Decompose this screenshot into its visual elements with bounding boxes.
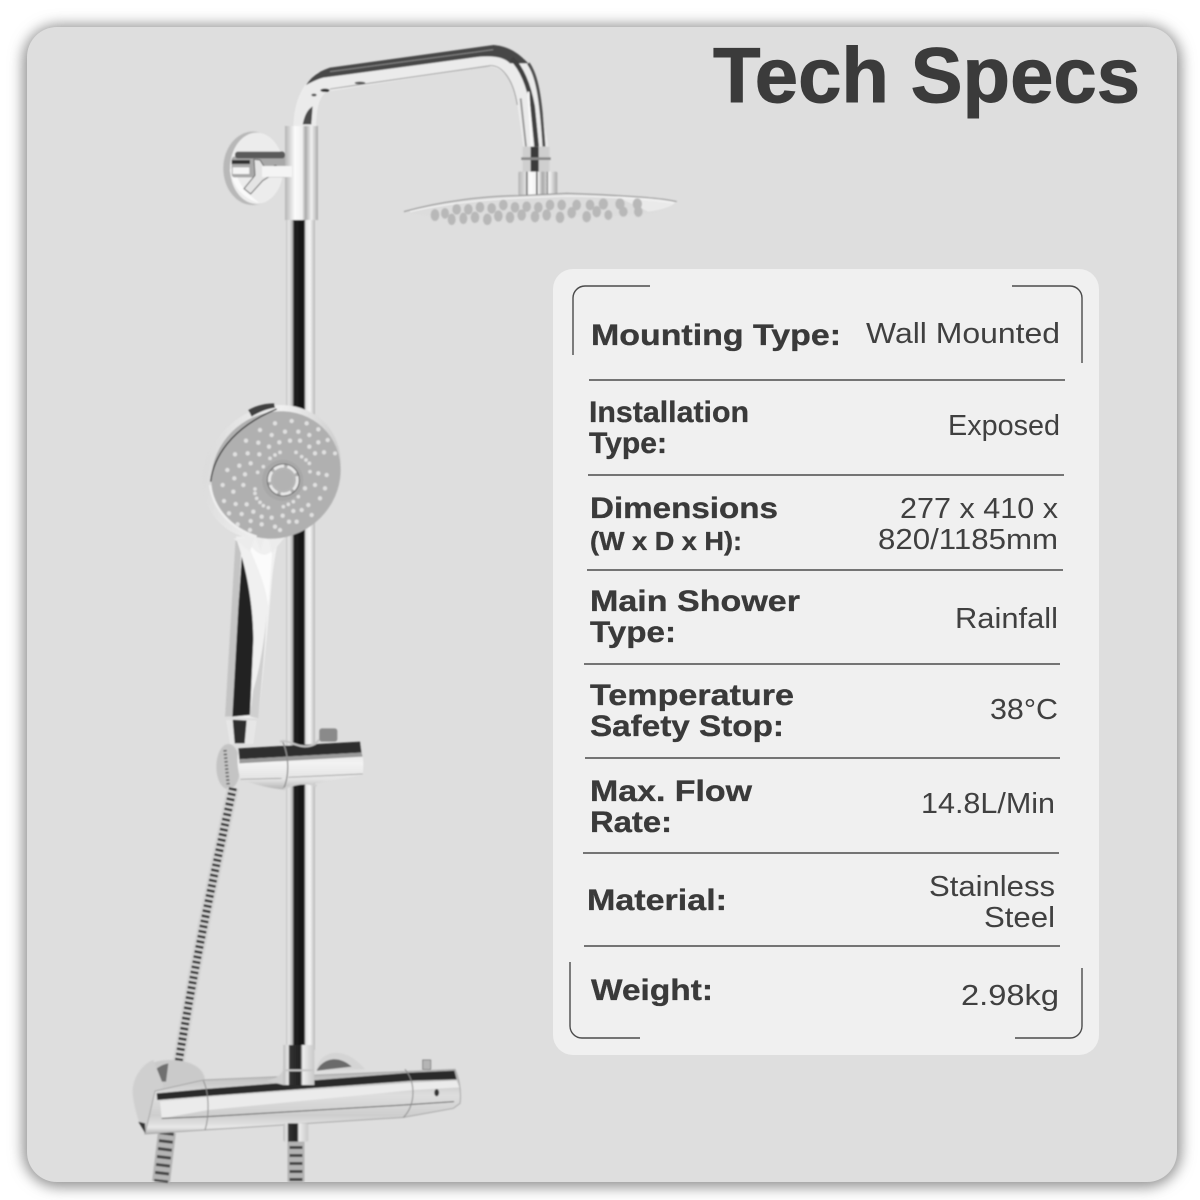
riser pole (286, 215, 315, 1050)
specs panel (553, 269, 1099, 1055)
row: dimensions (590, 492, 1059, 556)
slider clamp (216, 728, 363, 789)
shower arm connector (518, 147, 557, 196)
row: max flow rate: Max. Flow (590, 775, 753, 808)
row: dimensions: Dimensions (590, 492, 778, 525)
corner brackets (573, 286, 650, 355)
selector dial (262, 460, 303, 501)
row: material: Material: (587, 884, 727, 917)
row: weight: 2.98kg (961, 980, 1059, 1012)
hand shower head (175, 377, 368, 568)
bottom left bracket (570, 962, 640, 1038)
row: mounting type (591, 318, 1060, 352)
upper pole sleeve (285, 126, 318, 220)
row: installation type (589, 396, 1060, 460)
row: temperature safety stop: 38°C (990, 694, 1058, 726)
row: material (587, 871, 1055, 934)
row dividers (583, 380, 1065, 946)
row: max flow rate: 14.8L/Min (921, 788, 1055, 820)
row: installation type: Exposed (948, 410, 1060, 442)
row: material: Steel (984, 902, 1055, 934)
thermostatic valve (133, 1045, 460, 1142)
row: temperature safety stop: Safety Stop: (590, 710, 784, 743)
hose (176, 788, 233, 1078)
row: weight (591, 974, 1059, 1012)
row: temperature safety stop (590, 679, 1058, 743)
row: main shower type: Rainfall (955, 603, 1058, 635)
row: mounting type: Mounting Type: (591, 319, 841, 352)
row: dimensions: 820/1185mm (878, 524, 1058, 556)
row: material: Stainless (929, 871, 1055, 903)
row: temperature safety stop: Temperature (590, 679, 794, 712)
row: main shower type: Main Shower (590, 585, 800, 618)
bracket stub (262, 166, 292, 177)
spray nozzles (431, 198, 643, 225)
rainfall shower head (404, 193, 677, 225)
wall bracket (223, 132, 293, 205)
row: weight: Weight: (591, 974, 713, 1007)
top right bracket (1012, 286, 1082, 363)
shower illustration (133, 45, 677, 1182)
overhead arm (293, 45, 548, 147)
row: max flow rate (590, 775, 1055, 839)
row: main shower type: Type: (590, 616, 676, 649)
row: dimensions: 277 x 410 x (900, 493, 1059, 525)
row: installation type: Type: (589, 427, 667, 460)
panel background (553, 269, 1099, 1055)
row: dimensions: (W x D x H): (590, 526, 742, 556)
row: main shower type (590, 585, 1058, 649)
bottom right bracket (1015, 968, 1082, 1038)
hand shower neck (226, 720, 257, 744)
row: installation type: Installation (589, 396, 749, 429)
lower hoses (161, 1132, 296, 1182)
row: mounting type: Wall Mounted (866, 318, 1060, 350)
title: Tech Specs (713, 31, 1140, 119)
spray nozzles (220, 419, 337, 532)
row: max flow rate: Rate: (590, 806, 672, 839)
hand shower grip (225, 537, 278, 718)
